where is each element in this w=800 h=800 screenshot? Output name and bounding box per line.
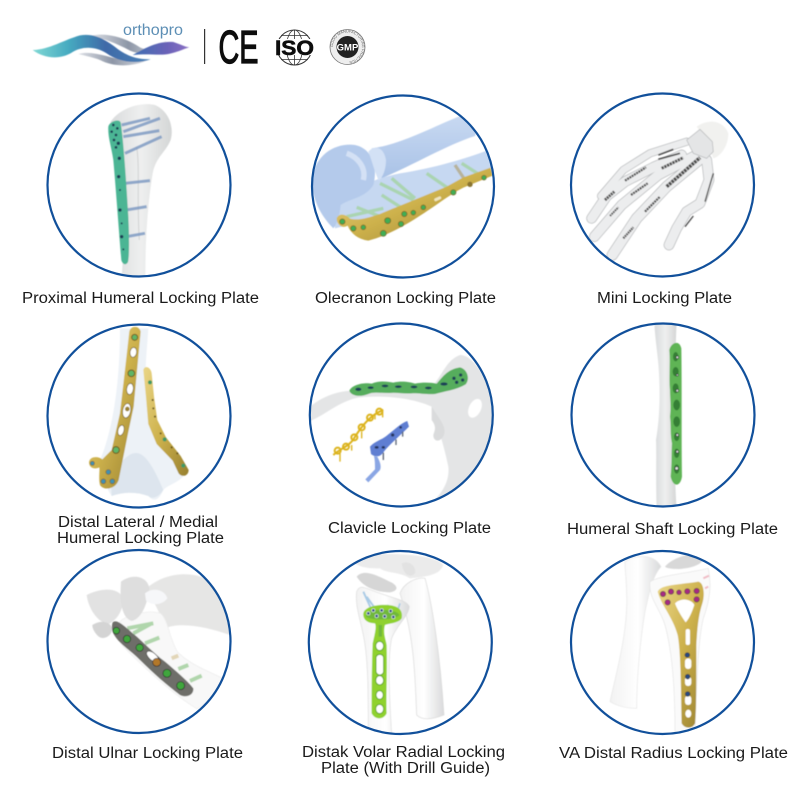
illustration: radius and ulna with gold plate bbox=[610, 554, 710, 735]
caption: Proximal Humeral Locking Plate bbox=[22, 290, 259, 307]
illustration: clavicle with green plate and sample plates bbox=[311, 354, 492, 498]
panel: clavicle plate bbox=[308, 324, 500, 537]
ring bbox=[312, 96, 494, 278]
illustration: elbow with gold plate bbox=[312, 116, 495, 241]
ring bbox=[571, 94, 754, 276]
caption bbox=[57, 514, 224, 547]
panel: VA distal radius plate bbox=[559, 551, 788, 762]
certification: GMP: GOOD MANUFACTURING PRACTICE bbox=[330, 30, 364, 64]
caption: Distal Lateral / Medial bbox=[58, 514, 218, 531]
caption bbox=[302, 744, 505, 777]
logo text: orthopro bbox=[123, 22, 183, 39]
caption: Clavicle Locking Plate bbox=[328, 520, 491, 537]
caption: VA Distal Radius Locking Plate bbox=[559, 745, 788, 762]
caption: Plate (With Drill Guide) bbox=[321, 760, 490, 777]
ring bbox=[309, 551, 492, 734]
header: logo and certifications bbox=[32, 21, 366, 73]
panel: distal humeral plates bbox=[48, 324, 230, 547]
ring bbox=[48, 550, 230, 733]
illustration: distal humerus with two gold plates bbox=[89, 327, 189, 500]
caption: Humeral Shaft Locking Plate bbox=[567, 521, 778, 538]
ring bbox=[48, 324, 230, 508]
panel: distal ulnar plate bbox=[48, 550, 243, 762]
panel: mini plate bbox=[571, 94, 754, 307]
certification: ISO bbox=[275, 30, 314, 65]
divider bbox=[204, 29, 205, 64]
caption: Olecranon Locking Plate bbox=[315, 290, 496, 307]
certification: GMP: GMP bbox=[337, 42, 359, 54]
ring bbox=[571, 551, 754, 734]
caption: Humeral Locking Plate bbox=[57, 530, 224, 547]
panel: proximal humeral plate bbox=[22, 94, 259, 307]
panel: distal volar radial plate bbox=[302, 551, 505, 777]
ring bbox=[310, 324, 493, 506]
caption: Mini Locking Plate bbox=[597, 290, 732, 307]
panel: humeral shaft plate bbox=[567, 322, 778, 538]
illustration: humerus with green plate bbox=[108, 104, 172, 280]
ring bbox=[572, 324, 754, 506]
illustration: hand skeleton with mini plates bbox=[592, 122, 728, 255]
illustration: radius and ulna with green plate bbox=[350, 554, 444, 735]
illustration: humeral shaft with green plate bbox=[654, 322, 682, 510]
logo: orthopro waves bbox=[33, 35, 189, 65]
ring bbox=[48, 94, 230, 276]
caption: Distak Volar Radial Locking bbox=[302, 744, 505, 761]
certification: CE mark: CE bbox=[218, 21, 258, 73]
caption: Distal Ulnar Locking Plate bbox=[52, 745, 243, 762]
illustration: distal ulna with grey plate bbox=[87, 574, 230, 709]
certification: ISO: ISO bbox=[275, 37, 314, 60]
panel: olecranon plate bbox=[312, 96, 496, 307]
